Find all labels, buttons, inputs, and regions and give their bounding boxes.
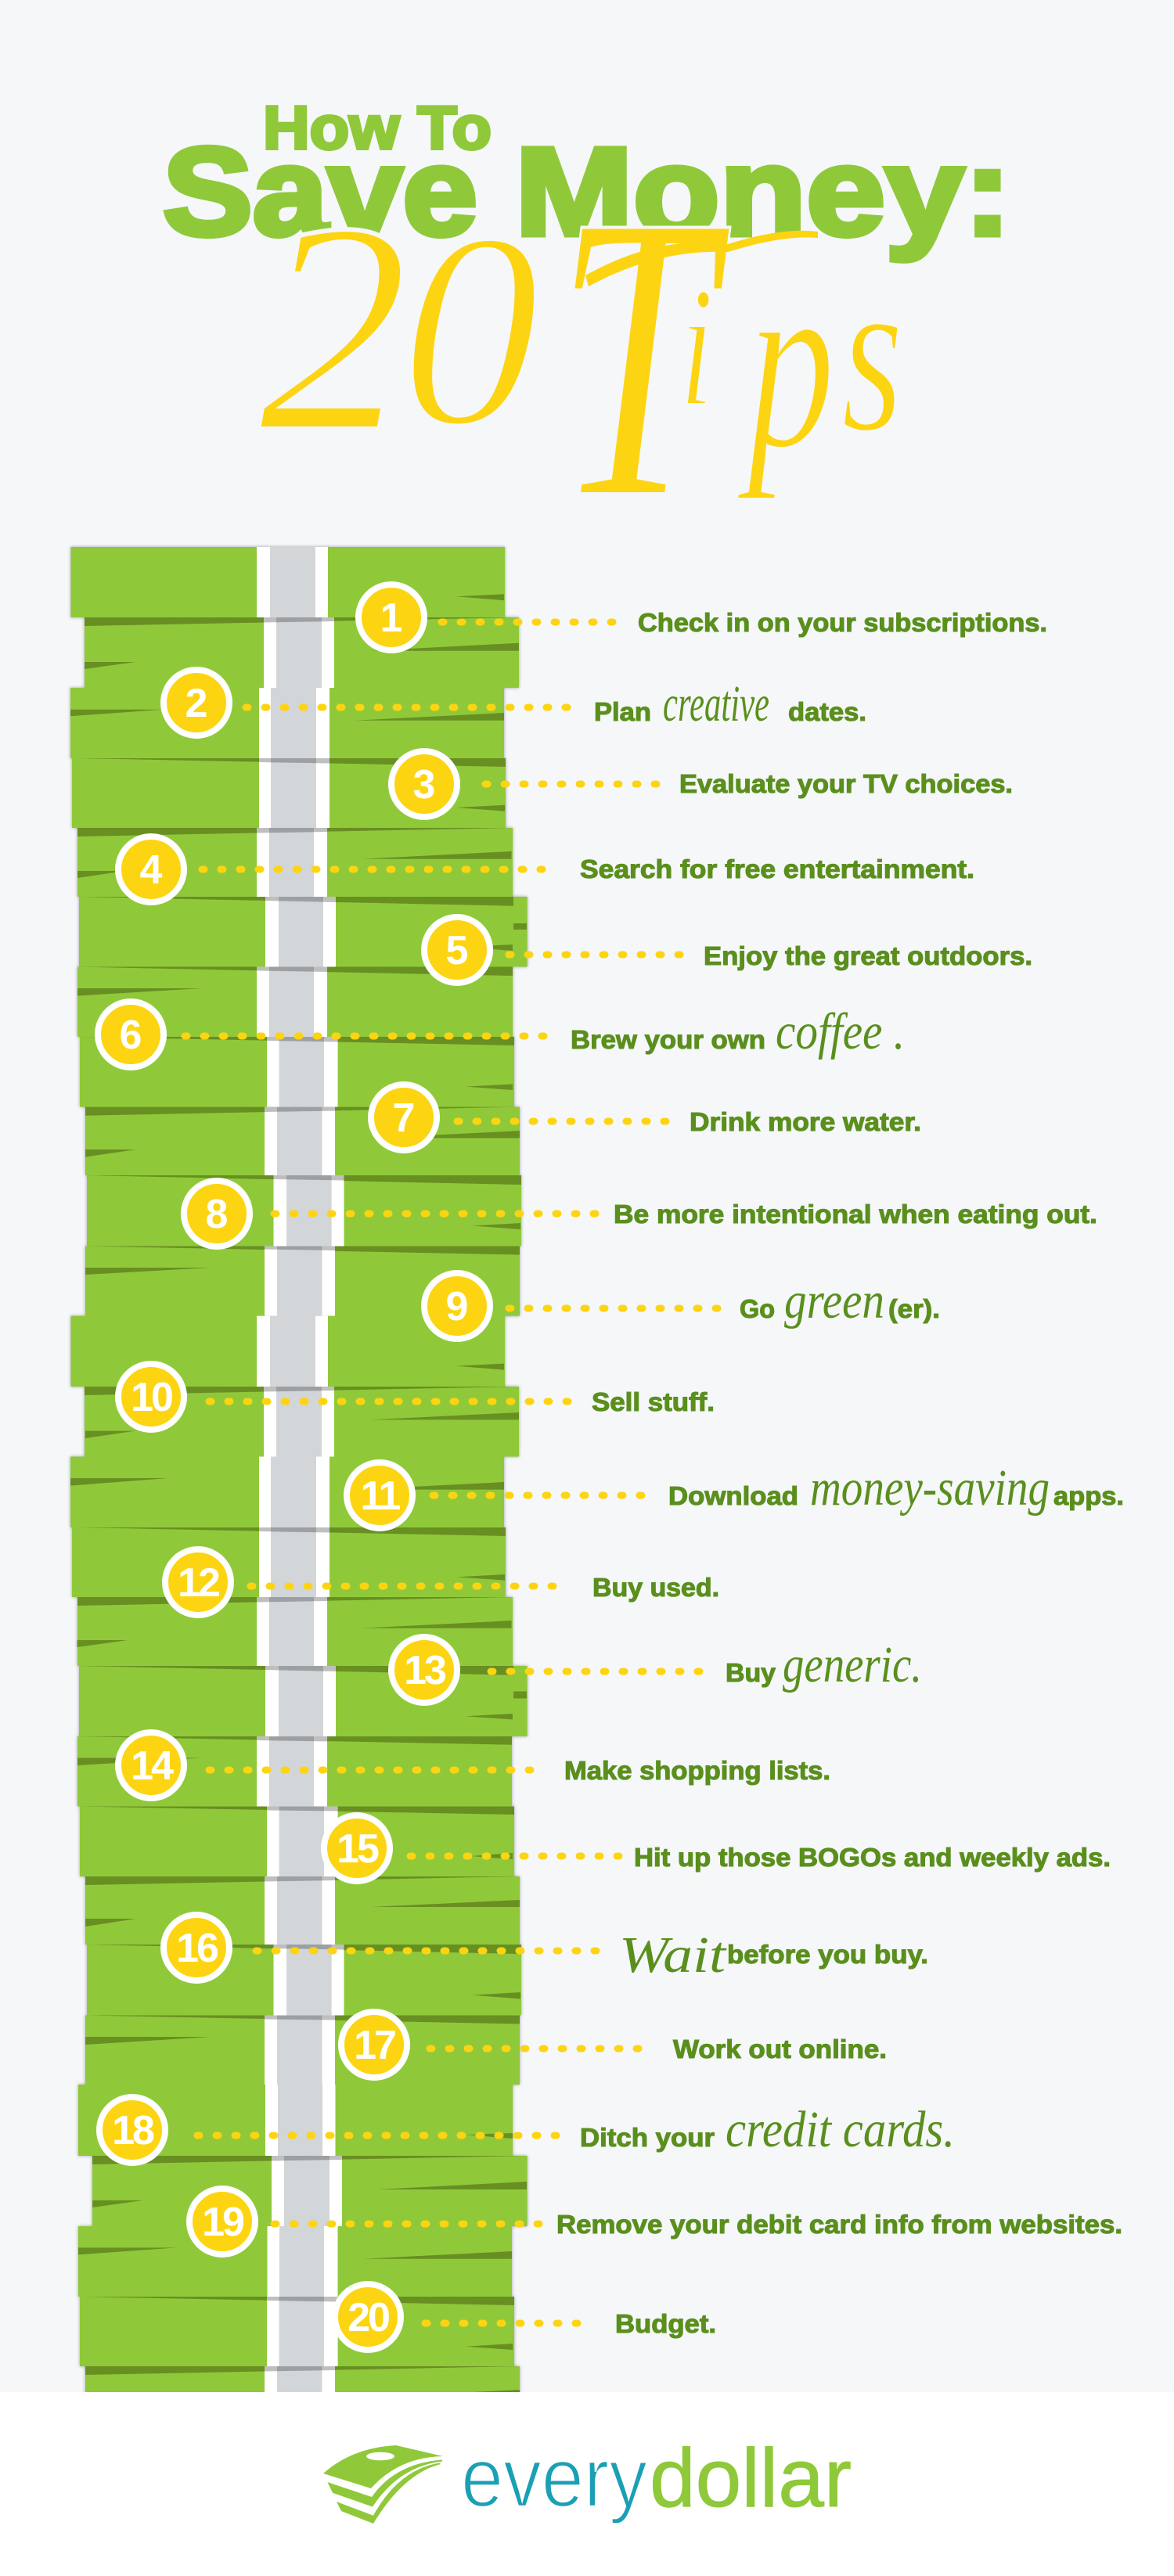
logo: everydollar (323, 2430, 852, 2524)
tip 2: 2 (185, 681, 207, 726)
panel: stack of money bills (70, 547, 528, 2398)
tip 9: (er). (888, 1294, 940, 1323)
title (163, 93, 1011, 583)
heading: How To: How To (263, 93, 492, 162)
tip 16: 16 (176, 1926, 218, 1971)
bill 24 (92, 2156, 528, 2226)
tip 14: 14 (131, 1743, 174, 1789)
bill 23 (78, 2085, 513, 2156)
tip 10: 10 (131, 1375, 172, 1420)
bill 14 (70, 1457, 504, 1527)
tip 11 (347, 1459, 1124, 1528)
heading: Save: Save (163, 121, 477, 261)
icon: stack of bills (323, 2445, 443, 2524)
tip 2: dates. (788, 697, 866, 726)
bill 17 (79, 1666, 528, 1736)
tip 19: Remove your debit card info from websites. (556, 2210, 1122, 2239)
heading: Tips script: T (555, 132, 733, 583)
tip 8: Be more intentional when eating out. (614, 1200, 1097, 1229)
tip 3: 3 (413, 762, 435, 808)
tip 15: 15 (337, 1826, 379, 1872)
bill 21 (87, 1945, 521, 2016)
tip 2 (164, 670, 866, 736)
tip 4: 4 (140, 847, 163, 893)
tip 17: Work out online. (673, 2035, 887, 2063)
tip 12 (165, 1549, 719, 1615)
tip 6: coffee . (776, 1003, 905, 1060)
swash on the T crossbar (585, 231, 818, 286)
tip 11: money-saving (810, 1459, 1050, 1516)
bill 13 (85, 1387, 519, 1457)
bill 5 (77, 828, 513, 897)
tip 7 (371, 1085, 921, 1150)
tip 9: green (784, 1272, 884, 1329)
tip 11: Download (668, 1481, 798, 1510)
tip 14 (118, 1732, 830, 1798)
tip 13 (391, 1636, 922, 1703)
heading: 20 script: 0 (401, 176, 540, 484)
tip 15 (324, 1815, 1111, 1881)
tip 9: 9 (446, 1284, 468, 1329)
tip 10 (118, 1364, 715, 1430)
tip 5: Enjoy the great outdoors. (704, 941, 1032, 970)
tip 9: Go (740, 1294, 775, 1323)
tip 6: Brew your own (571, 1025, 765, 1054)
tip 12: 12 (178, 1560, 219, 1606)
tip 4: Search for free entertainment. (580, 854, 974, 883)
tip 13: Buy (726, 1658, 776, 1687)
tip 9 (424, 1272, 940, 1339)
bill 9 (85, 1107, 520, 1175)
bill 1 (70, 547, 505, 617)
wordmark: every: every (461, 2430, 647, 2524)
tip 19: 19 (202, 2200, 243, 2245)
tip 13: generic. (783, 1636, 922, 1693)
bill 26 (80, 2297, 514, 2366)
tip 15: Hit up those BOGOs and weekly ads. (634, 1843, 1111, 1872)
bill 4 (72, 758, 506, 828)
tip 6: 6 (120, 1013, 142, 1058)
bill 11 (85, 1246, 520, 1316)
tip 4 (118, 836, 974, 902)
bill 6 (79, 897, 528, 967)
bill 7 (77, 967, 513, 1037)
wordmark: dollar: dollar (650, 2432, 852, 2524)
tip 14: Make shopping lists. (564, 1756, 830, 1785)
tip 11: apps. (1053, 1481, 1124, 1510)
tip 5: 5 (446, 928, 468, 973)
tip 18: credit cards. (726, 2101, 955, 2158)
tip 20: 20 (348, 2295, 389, 2340)
bill 8 (80, 1037, 514, 1107)
tip 16: Wait (619, 1927, 727, 1984)
bill 27 (85, 2366, 520, 2398)
bill 3 (70, 688, 504, 758)
bill 12 (70, 1316, 505, 1387)
tip 20 (335, 2284, 716, 2350)
tip 10: Sell stuff. (592, 1387, 715, 1416)
bill 18 (77, 1736, 512, 1806)
bill 19 (80, 1806, 514, 1876)
tip 13: 13 (404, 1648, 446, 1693)
tip 1: Check in on your subscriptions. (638, 608, 1047, 637)
tip 16: before you buy. (727, 1940, 928, 1969)
heading: Tips script: i (680, 252, 713, 443)
tip 11: 11 (361, 1473, 401, 1519)
tip 2: Plan (594, 697, 651, 726)
tip 1: 1 (380, 595, 402, 641)
heading: 20 script: 2 (258, 161, 409, 495)
tip 12: Buy used. (592, 1573, 719, 1602)
tip 3: Evaluate your TV choices. (679, 769, 1013, 798)
bill 15 (72, 1527, 506, 1597)
tip 1 (358, 585, 1047, 650)
heading: Tips script: p (736, 223, 835, 501)
tip 8: 8 (206, 1192, 228, 1237)
tip 6 (98, 1002, 905, 1067)
bill 20 (85, 1876, 520, 1945)
tip 19 (189, 2189, 1122, 2254)
tip 8 (184, 1181, 1097, 1247)
tip 17 (341, 2012, 887, 2078)
bill 2 (85, 617, 519, 688)
bill 10 (87, 1175, 521, 1246)
tip 5 (424, 917, 1032, 983)
heading: Money: Money: (515, 121, 1011, 261)
footer band (0, 2392, 1174, 2576)
tip 2: creative (663, 675, 769, 732)
tip 3 (391, 751, 1013, 817)
bill 22 (85, 2016, 520, 2085)
tip 7: 7 (393, 1096, 415, 1141)
tip 16 (164, 1915, 928, 1984)
tip 18: Ditch your (580, 2123, 715, 2152)
bill 25 (78, 2226, 512, 2297)
tip 7: Drink more water. (690, 1107, 921, 1136)
heading: Tips script: s (841, 228, 903, 480)
bill 16 (77, 1597, 513, 1666)
tip 20: Budget. (615, 2309, 716, 2338)
tip 18 (99, 2097, 955, 2163)
tip 17: 17 (354, 2023, 395, 2068)
tip 18: 18 (112, 2108, 154, 2153)
